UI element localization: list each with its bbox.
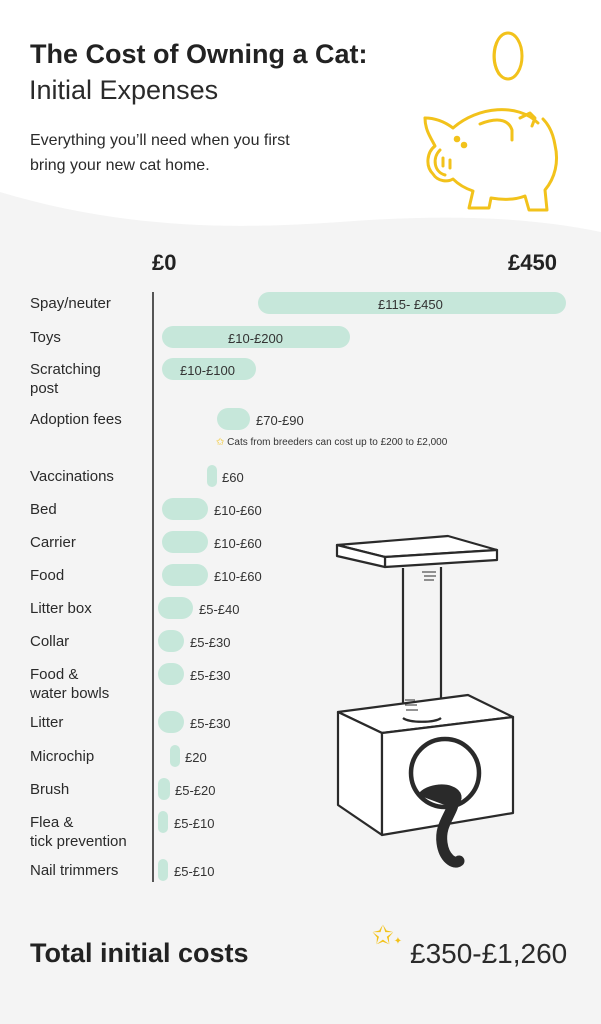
bar chart: £10-£60 bbox=[214, 503, 262, 518]
bar chart: £5-£40 bbox=[199, 602, 239, 617]
bar chart: £5-£20 bbox=[175, 783, 215, 798]
axis labels: £0 bbox=[152, 250, 176, 275]
icon: piggy bank with coin bbox=[424, 32, 558, 212]
bar chart: Toys bbox=[30, 329, 61, 346]
bar chart: Nail trimmers bbox=[30, 862, 118, 879]
header background with wave bbox=[0, 0, 601, 232]
bar chart: water bowls bbox=[30, 685, 109, 702]
bar chart: Bed bbox=[30, 501, 57, 518]
bar chart: £10-£60 bbox=[214, 536, 262, 551]
bar chart: Litter bbox=[30, 714, 63, 731]
bar chart: £5-£30 bbox=[190, 716, 230, 731]
bar chart bbox=[30, 292, 566, 881]
bar chart: £70-£90 bbox=[256, 413, 304, 428]
bar chart: post bbox=[30, 380, 58, 397]
total value: £350-£1,260 bbox=[410, 938, 567, 969]
bar chart: Food bbox=[30, 567, 64, 584]
bar chart: £5-£30 bbox=[190, 668, 230, 683]
bar chart: Litter box bbox=[30, 600, 92, 617]
bar chart: Scratching bbox=[30, 361, 101, 378]
bar chart: ✩ Cats from breeders can cost up to £200 to £2,000 bbox=[216, 437, 447, 448]
bar chart: Food & bbox=[30, 666, 78, 683]
bar chart: Vaccinations bbox=[30, 468, 114, 485]
bar chart: £20 bbox=[185, 750, 207, 765]
bar chart: Carrier bbox=[30, 534, 76, 551]
subtitle: Initial Expenses bbox=[29, 75, 218, 105]
axis line bbox=[152, 292, 154, 882]
bar chart: Spay/neuter bbox=[30, 295, 111, 312]
bar chart: £5-£10 bbox=[174, 864, 214, 879]
bar chart: Collar bbox=[30, 633, 69, 650]
icon: stars: ✩✦ bbox=[372, 920, 402, 950]
title: The Cost of Owning a Cat: bbox=[30, 39, 368, 69]
bar chart: £5-£10 bbox=[174, 816, 214, 831]
bar chart: tick prevention bbox=[30, 833, 127, 850]
bar chart: £10-£200 bbox=[228, 331, 283, 346]
bar chart: £10-£60 bbox=[214, 569, 262, 584]
bar chart: Microchip bbox=[30, 748, 94, 765]
intro text: Everything you’ll need when you first bbox=[30, 132, 290, 149]
bar chart: £115- £450 bbox=[378, 297, 443, 312]
bar chart: £5-£30 bbox=[190, 635, 230, 650]
bar chart: Flea & bbox=[30, 814, 73, 831]
bar chart: £10-£100 bbox=[180, 363, 235, 378]
bar chart: Adoption fees bbox=[30, 411, 122, 428]
total label: Total initial costs bbox=[30, 938, 249, 968]
intro text: bring your new cat home. bbox=[30, 157, 210, 174]
bar chart: £60 bbox=[222, 470, 244, 485]
text: £450 bbox=[508, 250, 557, 275]
intro text bbox=[30, 132, 290, 174]
bar chart: Brush bbox=[30, 781, 69, 798]
